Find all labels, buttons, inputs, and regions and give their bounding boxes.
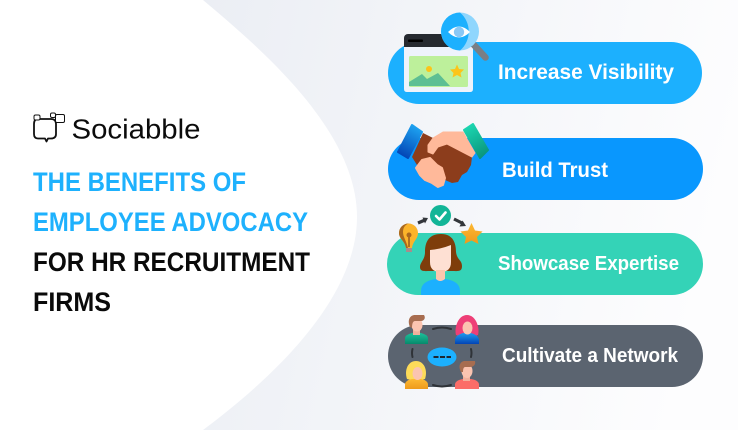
icon: speech bubbles <box>34 113 64 142</box>
label: Cultivate a Network <box>502 345 679 367</box>
title line 3: FOR HR RECRUITMENT <box>33 247 310 277</box>
logo wordmark: Sociabble <box>72 114 200 144</box>
network centre bubble <box>428 348 456 366</box>
label: Build Trust <box>502 158 608 182</box>
person: bottom left <box>405 361 428 389</box>
person: top right <box>455 315 479 344</box>
title line 4: FIRMS <box>33 287 111 317</box>
label: Showcase Expertise <box>498 253 679 275</box>
label: Increase Visibility <box>498 60 674 84</box>
icon: handshake <box>398 124 488 187</box>
icon: person with ideas <box>399 205 482 295</box>
icon: people network <box>405 315 479 389</box>
panel: Increase Visibility <box>388 12 702 104</box>
person: bottom right <box>455 361 479 389</box>
person: top left <box>405 315 428 344</box>
title line 1: THE BENEFITS OF <box>33 167 246 197</box>
panel: Build Trust <box>388 124 703 200</box>
pill <box>388 138 703 200</box>
pill <box>388 42 702 104</box>
title <box>33 167 310 317</box>
title line 2: EMPLOYEE ADVOCACY <box>33 207 308 237</box>
pill <box>387 233 703 295</box>
panel: Cultivate a Network <box>388 315 703 389</box>
pill <box>388 325 703 387</box>
panel: left white curved panel <box>0 0 357 430</box>
panel: Showcase Expertise <box>387 205 703 295</box>
logo: Sociabble <box>34 113 200 144</box>
icon: browser window with magnifier <box>404 12 486 92</box>
